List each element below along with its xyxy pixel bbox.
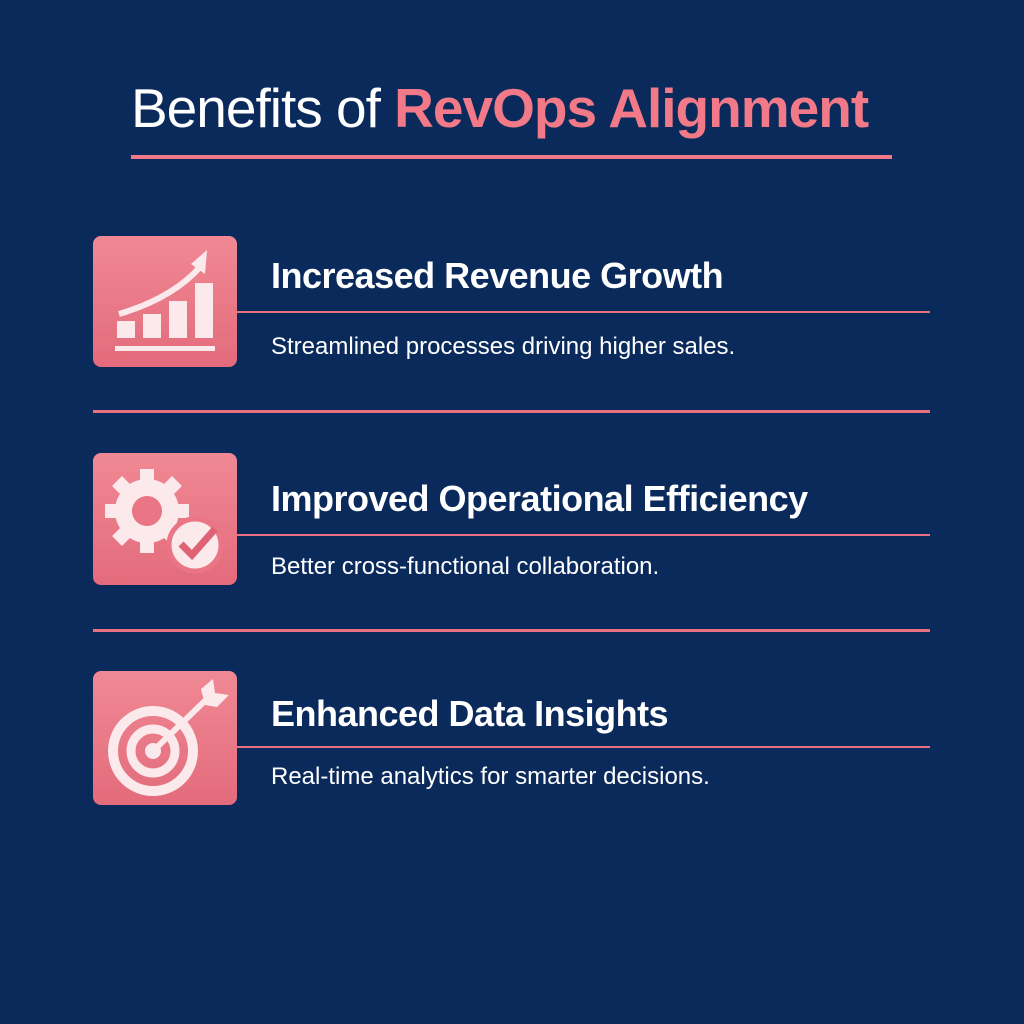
text 3: Real-time analytics for smarter decisions. [271,763,710,790]
icon: target [93,671,237,805]
icon: gear with check [93,453,237,585]
icon: revenue growth chart [93,236,237,367]
title: Benefits of RevOps Alignment [131,77,868,139]
heading 1: Increased Revenue Growth [271,255,723,296]
heading 3: Enhanced Data Insights [271,693,668,734]
text 2: Better cross-functional collaboration. [271,553,659,580]
text 1: Streamlined processes driving higher sales. [271,333,735,360]
heading 2: Improved Operational Efficiency [271,478,808,519]
